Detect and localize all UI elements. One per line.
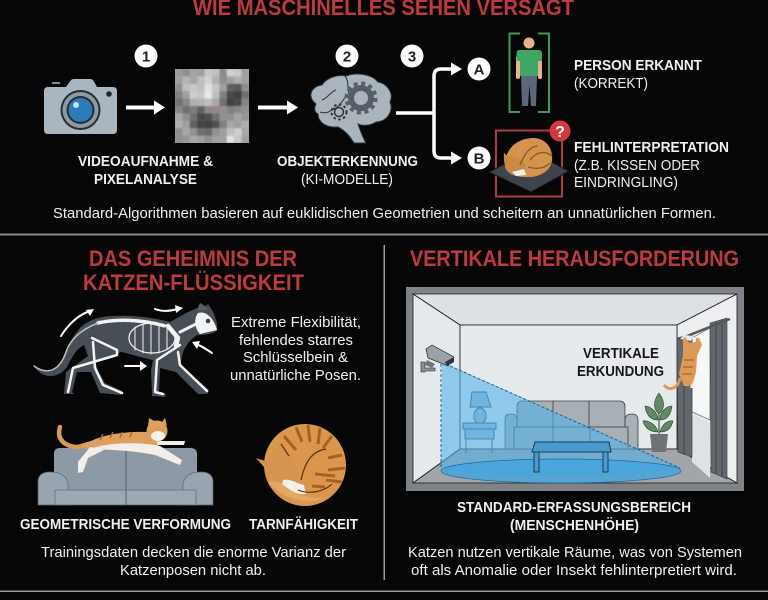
text: flexibility	[230, 314, 361, 384]
icon: camera	[44, 79, 117, 134]
heading: cat liquid	[83, 246, 304, 295]
text: geometric deformation label: GEOMETRISCHE VERFORMUNG	[20, 516, 231, 533]
arrow: camera to pixels	[126, 100, 165, 114]
text: camouflage label: TARNFÄHIGKEIT	[249, 516, 358, 533]
text: outcome B: FEHLINTERPRETATION	[574, 139, 729, 156]
image: pixelated frame	[175, 69, 249, 143]
icon: plant	[643, 393, 673, 452]
text: outcome B	[574, 139, 729, 191]
text: vertical caption	[408, 544, 742, 579]
text: standard coverage label: (MENSCHENHÖHE)	[510, 517, 639, 534]
text: outcome B: EINDRINGLING)	[574, 174, 678, 191]
panel: cat liquid	[20, 246, 361, 579]
text: flexibility: fehlendes starres	[239, 332, 353, 349]
heading: cat liquid: DAS GEHEIMNIS DER	[89, 246, 297, 271]
step number 3: 3	[408, 48, 416, 66]
coverage cone	[441, 362, 680, 476]
icon: sofa	[505, 401, 638, 449]
step number 1	[134, 44, 158, 68]
icon: misread cat on cushion: ?	[555, 124, 565, 141]
text: step 1 label	[78, 153, 213, 188]
text: flexibility: unnatürliche Posen.	[230, 367, 361, 384]
text: pipeline caption: Standard-Algorithmen basieren auf euklidischen Geometrien und scheitern an unnatürlichen Formen.	[53, 205, 716, 222]
coverage floor ellipse	[441, 459, 681, 483]
room surfaces	[413, 294, 737, 483]
text: training data caption: Katzenposen nicht ab.	[120, 562, 266, 579]
text: step 2 label	[277, 153, 418, 188]
icon: side table with lamp	[463, 392, 496, 453]
text: standard coverage label	[457, 499, 691, 534]
text: flexibility: Extreme Flexibilität,	[231, 314, 361, 331]
label: vertical exploration: VERTIKALE	[583, 345, 659, 362]
panel: pipeline	[44, 34, 729, 222]
icon: window and curtains	[677, 318, 730, 479]
text: outcome A	[574, 57, 702, 92]
icon: brain with gears	[311, 74, 391, 143]
icon: curled camouflaged cat	[256, 424, 346, 506]
text: step 1 label: VIDEOAUFNAHME &	[78, 153, 213, 170]
text: training data caption: Trainingsdaten decken die enorme Varianz der	[41, 544, 346, 561]
icon: detected person	[510, 34, 549, 112]
icon: misread cat on cushion	[489, 120, 570, 196]
icon: security camera	[421, 345, 454, 372]
text: vertical caption: oft als Anomalie oder Insekt fehlinterpretiert wird.	[411, 562, 737, 579]
step number 2	[336, 44, 358, 68]
text: standard coverage label: STANDARD-ERFASSUNGSBEREICH	[457, 499, 691, 516]
text: vertical caption: Katzen nutzen vertikale Räume, was von Systemen	[408, 544, 742, 561]
icon: cat skeleton	[33, 303, 217, 397]
step number 3	[400, 44, 424, 68]
arrow: branching decision	[396, 62, 462, 164]
heading: cat liquid: KATZEN-FLÜSSIGKEIT	[83, 270, 304, 295]
arrow: pixels to brain	[258, 100, 298, 114]
text: training data caption	[41, 544, 346, 579]
text: step 2 label: (KI-MODELLE)	[301, 171, 393, 188]
text: outcome A: (KORREKT)	[574, 75, 648, 92]
text: flexibility: Schlüsselbein &	[243, 349, 348, 366]
text: step 1 label: PIXELANALYSE	[94, 171, 197, 188]
label: vertical exploration: ERKUNDUNG	[577, 363, 664, 380]
panel: vertical challenge	[406, 246, 744, 579]
outcome badge B	[468, 146, 490, 170]
label: vertical exploration	[577, 345, 664, 380]
icon: cat draped over sofa	[38, 418, 213, 505]
outcome badge B: B	[474, 150, 485, 168]
outcome badge A	[468, 58, 490, 80]
step number 1: 1	[142, 48, 150, 66]
icon: cat climbing curtain	[664, 335, 702, 389]
text: step 2 label: OBJEKTERKENNUNG	[277, 153, 418, 170]
outcome badge A: A	[474, 62, 485, 78]
icon: coffee table	[532, 442, 611, 472]
step number 2: 2	[343, 48, 351, 66]
text: outcome A: PERSON ERKANNT	[574, 57, 702, 74]
text: outcome B: (Z.B. KISSEN ODER	[574, 157, 700, 174]
diagram: room with camera coverage	[406, 287, 744, 491]
